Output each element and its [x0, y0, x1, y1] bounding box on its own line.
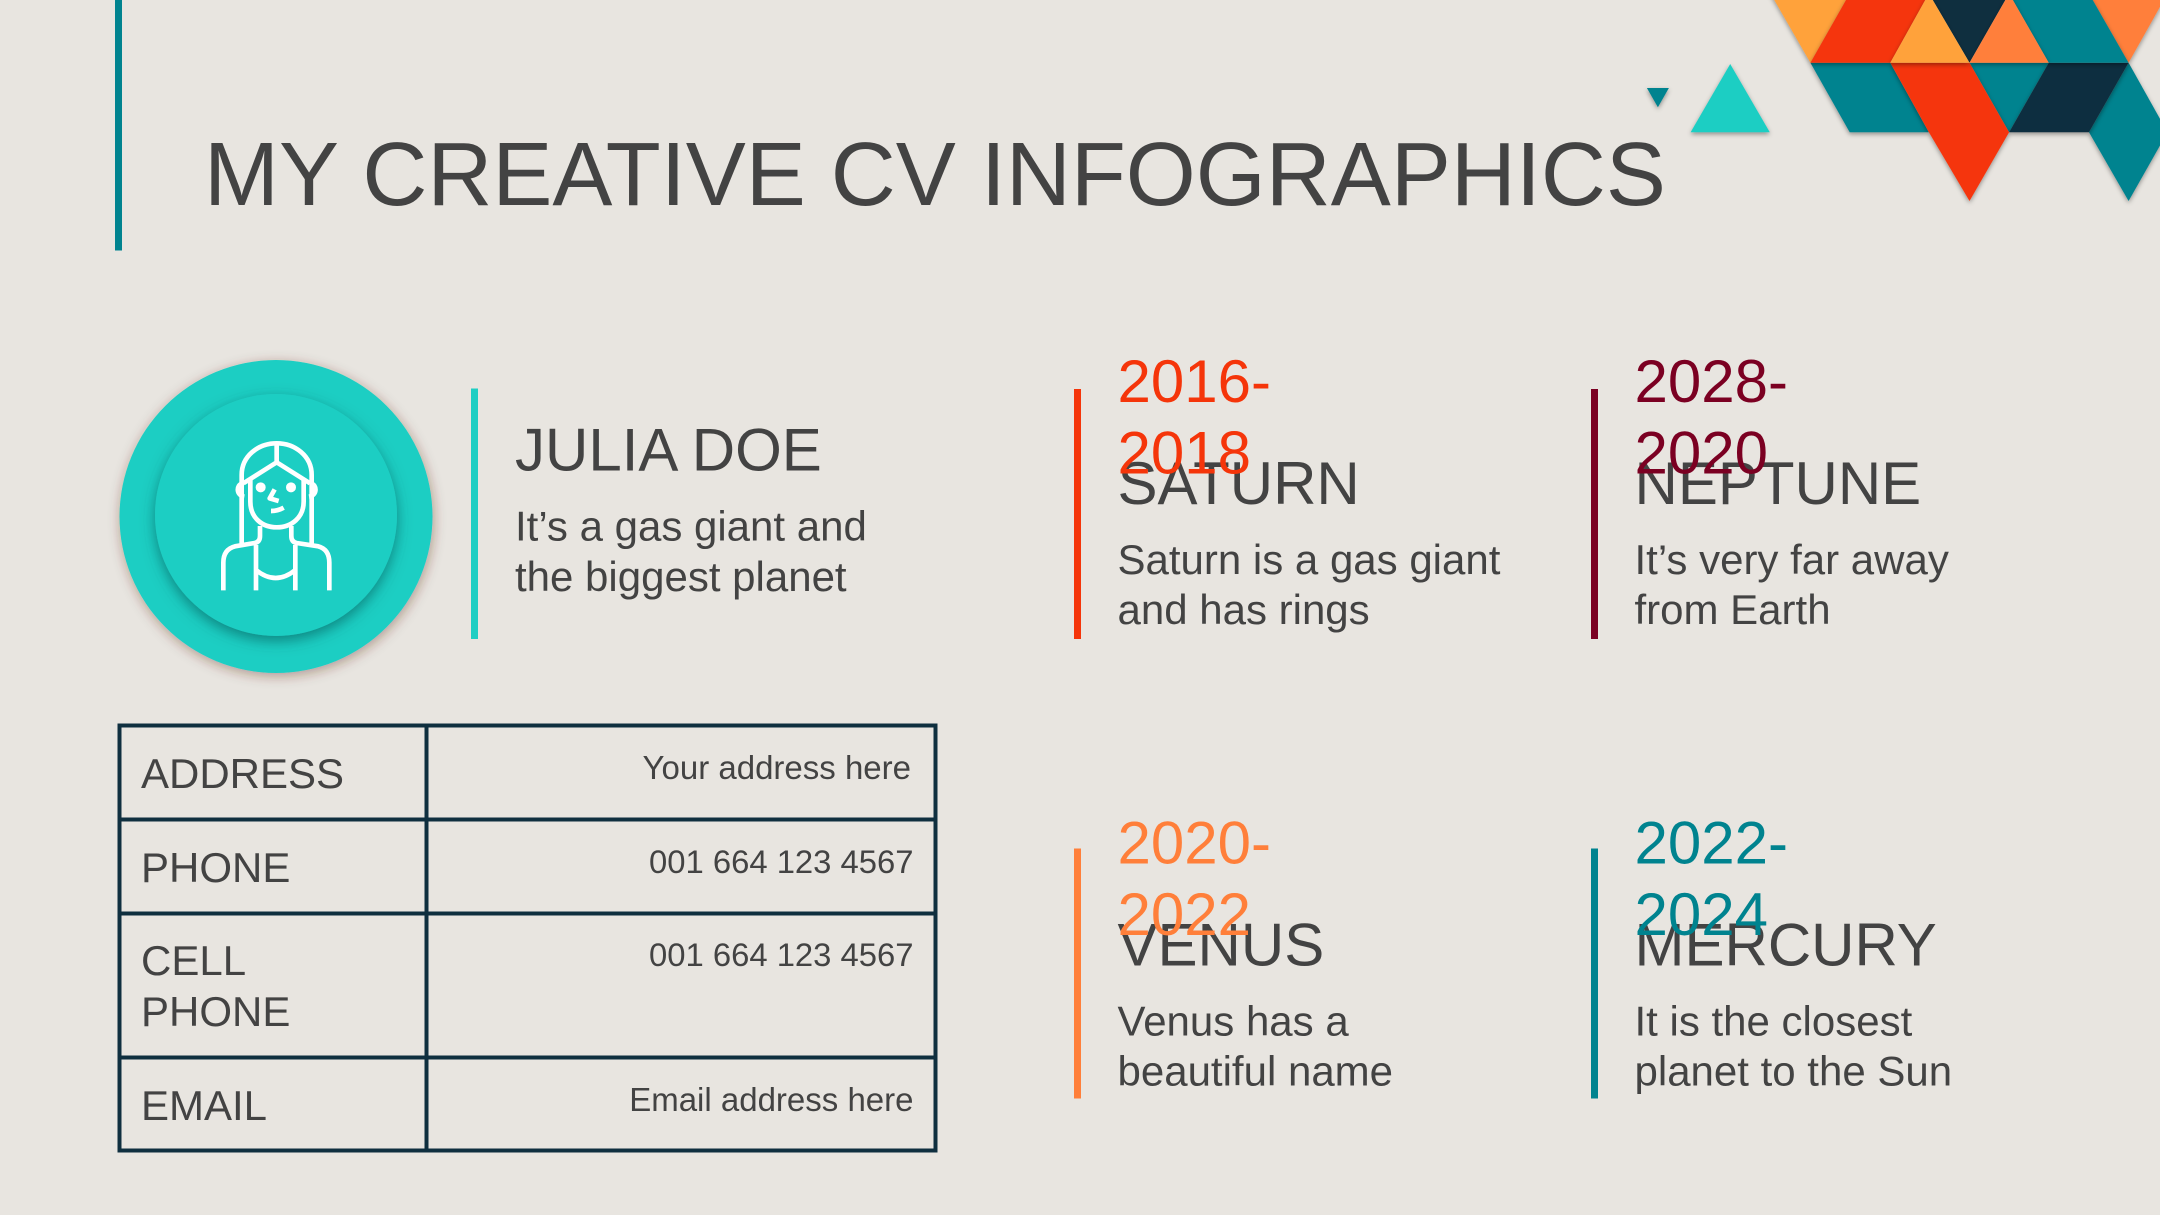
planet name: SATURN	[1118, 450, 1360, 517]
planet name: NEPTUNE	[1634, 450, 1921, 517]
dates: 2020-	[1118, 810, 1271, 876]
planet description: Venus has a	[1118, 998, 1349, 1044]
panel: Saturn	[1074, 348, 1501, 639]
row: cell phone: PHONE	[141, 988, 290, 1035]
planet description: planet to the Sun	[1634, 1048, 1952, 1094]
icon: woman portrait	[223, 443, 329, 590]
dates: 2024	[1634, 881, 1768, 948]
dates: 2028-	[1634, 348, 1788, 415]
row: phone	[141, 843, 914, 891]
panel: Mercury	[1591, 810, 1952, 1098]
row: cell phone	[141, 936, 914, 1035]
planet name: MERCURY	[1634, 912, 1937, 978]
planet description: beautiful name	[1118, 1048, 1393, 1094]
panel: Neptune	[1591, 348, 1949, 639]
title accent bar	[115, 0, 122, 250]
panel: profile	[471, 388, 867, 639]
contact table	[120, 724, 936, 1152]
row: address	[141, 749, 911, 797]
avatar badge	[120, 360, 432, 673]
decorative triangle mosaic	[1770, 0, 2160, 201]
row: cell phone: 001 664 123 4567	[649, 936, 914, 973]
icon: small teal triangle	[1647, 88, 1669, 107]
profile bar	[471, 388, 478, 639]
icon: turquoise triangle	[1691, 64, 1770, 132]
row: phone: 001 664 123 4567	[649, 843, 914, 880]
name: JULIA DOE	[515, 416, 822, 484]
row: address: Your address here	[643, 749, 911, 786]
panel: Venus	[1074, 810, 1393, 1098]
planet description: and has rings	[1118, 586, 1370, 633]
table grid	[120, 724, 936, 1152]
row: email	[141, 1081, 914, 1129]
planet description: It is the closest	[1634, 998, 1913, 1044]
row: email: EMAIL	[141, 1082, 267, 1129]
row: cell phone: CELL	[141, 937, 246, 984]
dates: 2016-	[1118, 348, 1271, 415]
row: address: ADDRESS	[141, 750, 344, 797]
planet description: It’s very far away	[1634, 536, 1949, 583]
profile description: the biggest planet	[515, 553, 847, 600]
inner circle	[155, 394, 397, 636]
profile description: It’s a gas giant and	[515, 502, 867, 550]
outer circle	[120, 360, 432, 673]
dates: 2018	[1118, 420, 1251, 486]
planet description: Saturn is a gas giant	[1118, 536, 1501, 583]
row: email: Email address here	[629, 1081, 914, 1118]
title: MY CREATIVE CV INFOGRAPHICS	[204, 125, 1666, 225]
dates: 2022	[1118, 881, 1251, 948]
planet description: from Earth	[1634, 586, 1831, 633]
dates: 2022-	[1634, 810, 1788, 876]
row: phone: PHONE	[141, 844, 290, 891]
dates: 2020	[1634, 420, 1768, 486]
planet name: VENUS	[1118, 912, 1324, 978]
